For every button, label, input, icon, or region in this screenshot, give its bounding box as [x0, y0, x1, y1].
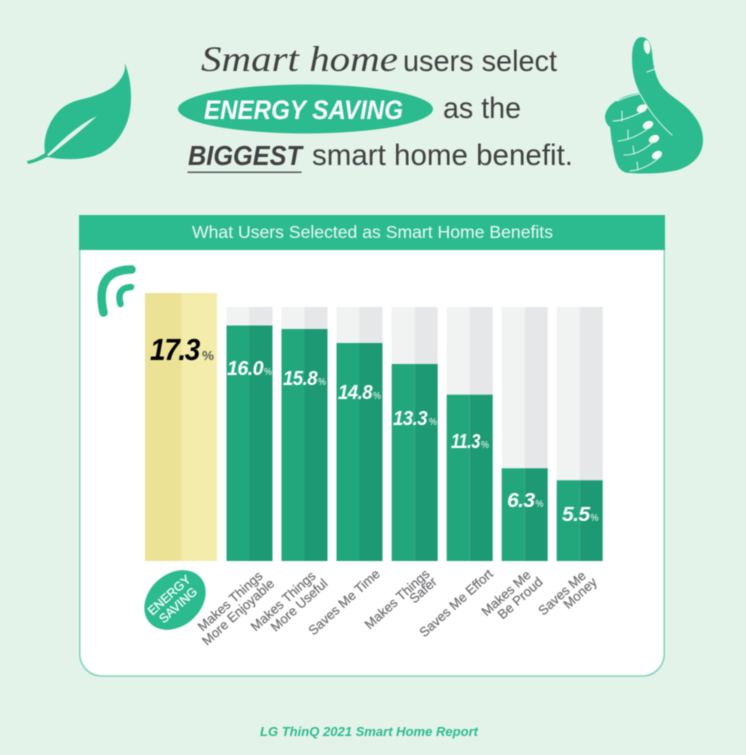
heading line 1 — [201, 39, 558, 79]
label: energy saving badge: ENERGY — [145, 572, 194, 618]
label: saves me money: Money — [560, 574, 600, 612]
footer source: LG ThinQ 2021 Smart Home Report — [260, 725, 479, 739]
thumb nail and finger nails — [635, 40, 664, 161]
label: saves me money: Saves Me — [535, 568, 589, 618]
bar: makes me be proud 6.3: 6.3 — [507, 489, 536, 512]
heading line 1: users select — [403, 45, 558, 78]
bar: saves me time 14.8: % — [373, 390, 382, 402]
bar: saves me effort 11.3 — [447, 307, 493, 561]
bar: energy saving 17.3: 17.3 — [150, 332, 200, 367]
label: saves me effort: Saves Me Effort — [416, 566, 496, 640]
label: makes things more enjoyable: Makes Things — [195, 568, 266, 634]
bar: energy saving 17.3: % — [202, 348, 214, 363]
bar: makes things more useful 15.8: 15.8 — [283, 367, 318, 390]
bar: makes things more enjoyable 16.0: % — [264, 366, 273, 378]
bar: makes things more enjoyable 16.0 — [226, 307, 273, 561]
bar: makes things safer 13.3 — [392, 307, 438, 561]
panel background — [80, 216, 664, 676]
label: makes things safer: Makes Things — [362, 566, 433, 632]
bar: saves me effort 11.3: 11.3 — [451, 430, 481, 453]
bar: energy saving 17.3 — [145, 293, 217, 561]
bar: saves me effort 11.3: % — [481, 439, 490, 451]
heading line 1: Smart home — [201, 39, 398, 79]
heading — [178, 39, 573, 173]
bar: makes things more useful 15.8: % — [318, 376, 327, 388]
bar: saves me money 5.5 — [557, 307, 603, 561]
label: makes me be proud: Makes Me — [478, 567, 534, 619]
bar: makes me be proud 6.3: % — [536, 498, 544, 510]
label: makes me be proud: Be Proud — [495, 574, 546, 622]
icon: leaf — [27, 63, 131, 164]
bar: saves me time 14.8 — [336, 307, 382, 561]
bar: makes things safer 13.3: 13.3 — [393, 407, 428, 430]
label: makes things more useful: Makes Things — [248, 568, 319, 634]
bar: makes me be proud 6.3 — [502, 307, 548, 561]
icon: thumbs up — [605, 37, 703, 174]
label: makes things more enjoyable: More Enjoyable — [199, 576, 277, 648]
heading line 3: BIGGEST — [188, 140, 305, 171]
highlight: energy saving — [178, 84, 433, 134]
panel header: What Users Selected as Smart Home Benefits — [192, 222, 553, 242]
heading line 2: as the — [443, 92, 521, 125]
bar: makes things more enjoyable 16.0: 16.0 — [227, 357, 264, 380]
label: saves me time: Saves Me Time — [305, 566, 383, 638]
finger lines — [613, 69, 672, 171]
label: energy saving badge — [132, 558, 218, 642]
label: energy saving badge: SAVING — [156, 585, 200, 626]
bar: saves me money 5.5: 5.5 — [562, 503, 591, 526]
label: makes things safer: Safer — [406, 574, 440, 606]
panel: chart — [79, 215, 665, 676]
heading line 3 — [188, 139, 573, 173]
bar: makes things safer 13.3: % — [429, 416, 438, 428]
icon: wifi signal — [102, 270, 132, 312]
heading line 3: smart home benefit. — [312, 139, 573, 172]
label: makes things more useful: More Useful — [268, 576, 331, 634]
bar: makes things more useful 15.8 — [282, 307, 328, 561]
bar: saves me money 5.5: % — [590, 512, 599, 524]
panel header — [79, 215, 665, 250]
bar: saves me time 14.8: 14.8 — [338, 381, 373, 404]
highlight: energy saving: ENERGY SAVING — [204, 95, 403, 125]
